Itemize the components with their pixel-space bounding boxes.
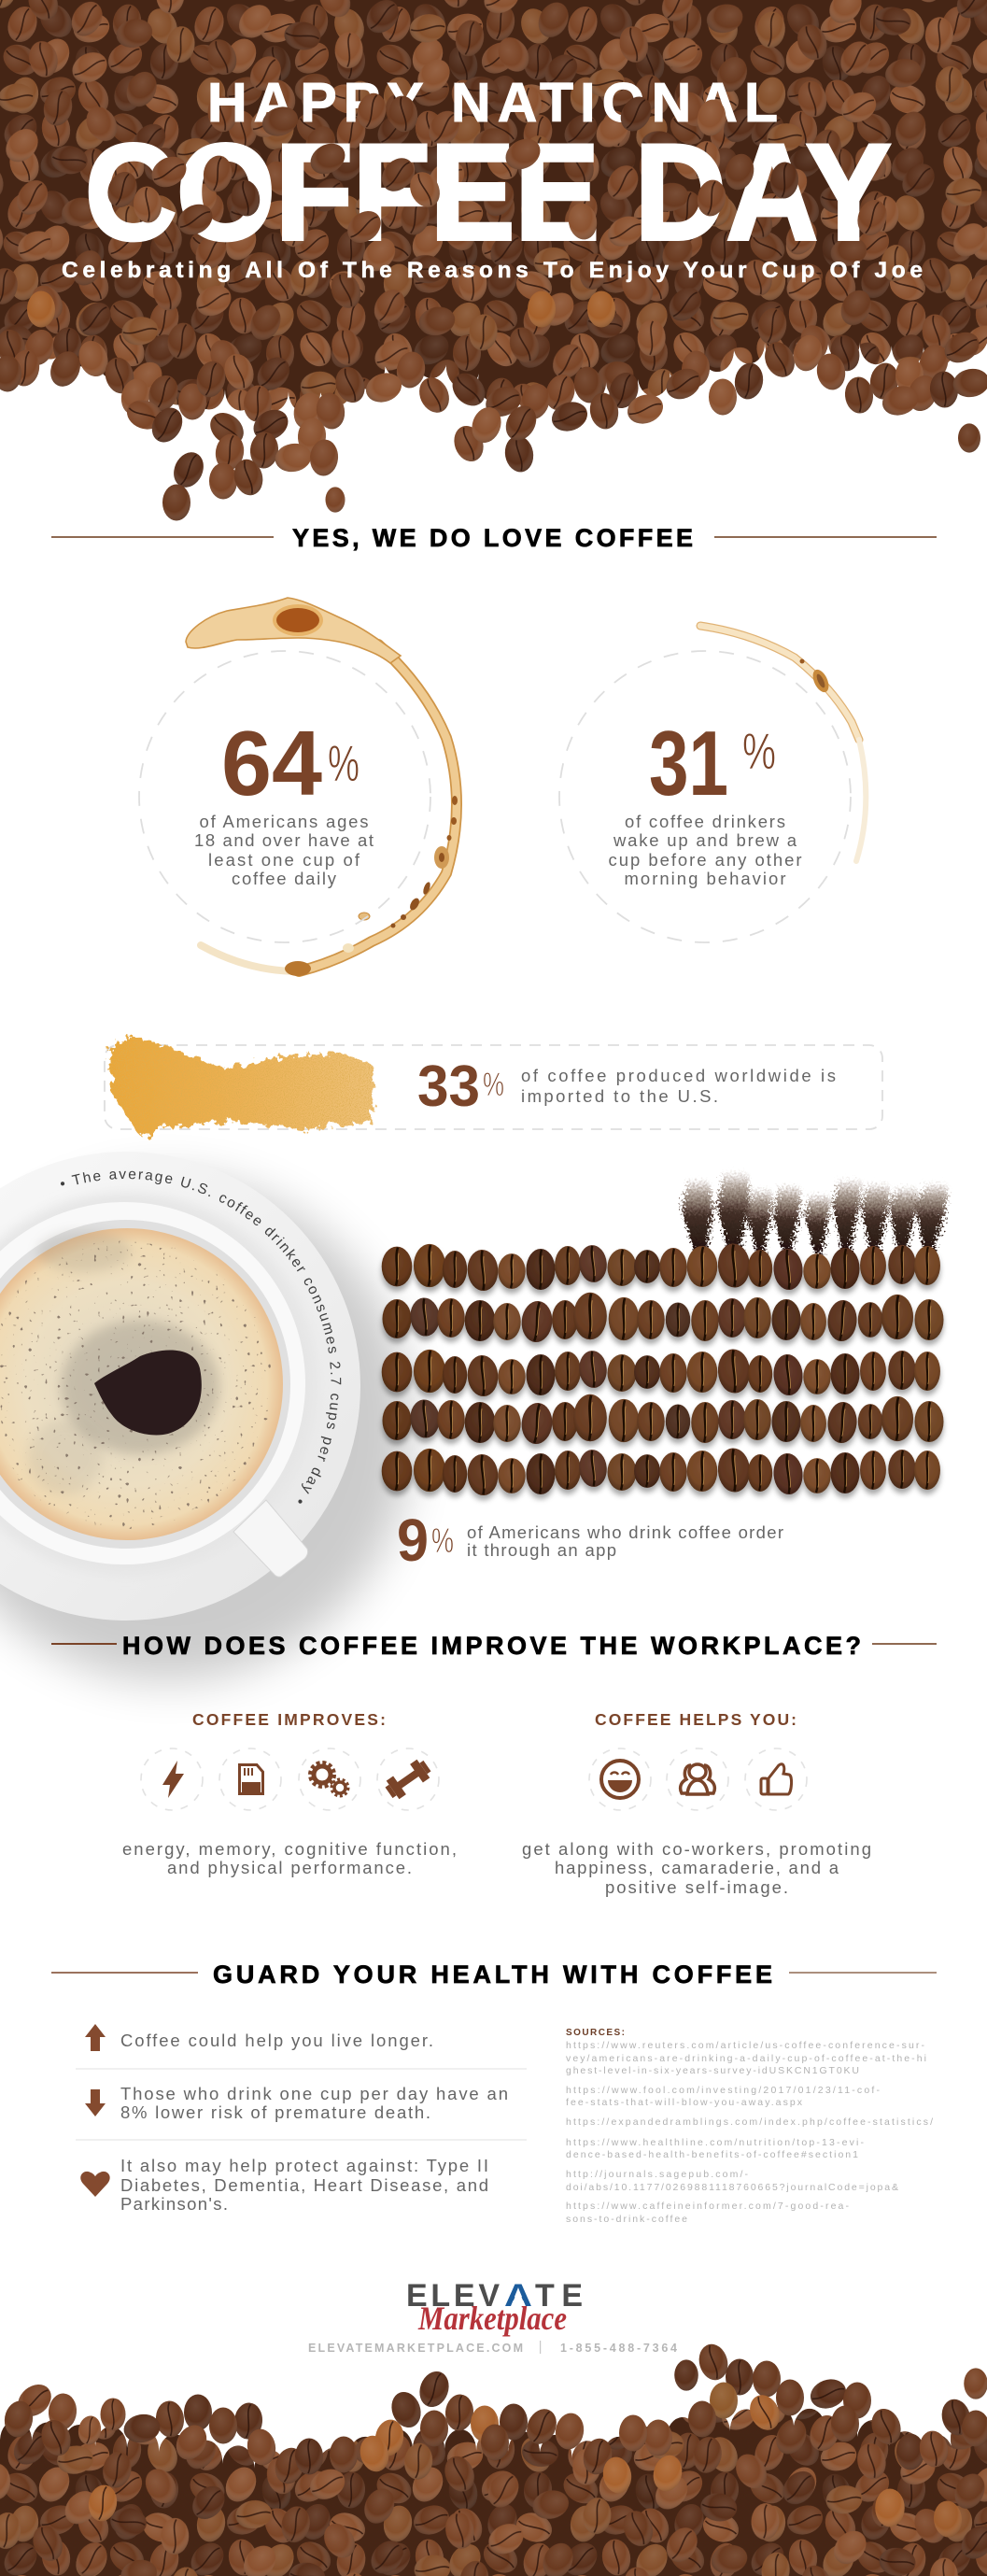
icon: heart [80,2172,110,2197]
stat: 31 percent: cup before any other [609,850,801,870]
panel: coffee improves: COFFEE IMPROVES: [192,1710,386,1729]
benefit: protection: Diabetes, Dementia, Heart Disease, and [120,2175,488,2195]
header bean field [0,0,987,521]
stat panel: 33 percent: % [483,1067,504,1103]
coffee grounds above beans [682,1171,949,1253]
coffee surface [0,1228,283,1540]
coffee cup illustration [0,1152,431,1701]
cup handle [233,1500,308,1577]
title line: Coffee Day: COFFEE DAY [85,116,891,268]
icon: dumbbell [377,1748,439,1810]
benefit: protection: Parkinson's. [120,2194,228,2214]
subtitle: Celebrating All Of The Reasons To Enjoy Your Cup Of Joe [62,258,923,283]
benefit: live longer: Coffee could help you live longer. [120,2031,433,2050]
stat panel: 33 percent: imported to the U.S. [521,1086,718,1106]
panel: sources: vey/americans-are-drinking-a-daily-cup-of-coffee-at-the-hi [566,2053,926,2064]
brown sugar swatch [108,1035,374,1138]
icon: gears [299,1748,360,1810]
title line: Happy National: HAPPY NATIONAL [207,72,778,134]
icon: thumbs up [745,1748,807,1810]
logo: Elevate Marketplace [406,2278,583,2337]
contact line [308,2341,677,2355]
benefit: lower risk: Those who drink one cup per day have an [120,2084,508,2103]
stat: 9 percent: of Americans who drink coffee order [467,1522,783,1542]
coffee ring stain 2 [700,626,866,861]
panel: sources: https://www.caffeineinformer.com/7-good-rea- [566,2201,850,2212]
stat: 64 percent: % [328,734,360,792]
panel: sources: SOURCES: [566,2028,625,2038]
icon: lightning bolt [141,1748,203,1810]
benefit: protection: It also may help protect against: Type II [120,2156,488,2175]
stat: 9 percent: % [431,1522,454,1560]
panel: coffee helps you [522,1710,871,1897]
panel: sources: http://journals.sagepub.com/- [566,2169,749,2180]
stat: 31 percent: 31 [649,712,728,814]
beans overlapping title [103,90,892,249]
icon: smile [589,1748,651,1810]
panel: coffee helps you: positive self-image. [605,1877,788,1897]
saucer [0,1152,360,1621]
cup rim [0,1202,305,1564]
stat: 31 percent: of coffee drinkers [625,812,785,831]
stat: 64 percent: least one cup of [208,850,360,870]
icon: memory card [219,1748,281,1810]
logo: Elevate Marketplace: A [504,2278,532,2314]
panel: sources: dence-based-health-benefits-of-coffee#section1 [566,2149,858,2160]
stat: 31 percent: morning behavior [624,869,786,888]
panel: health benefits [76,2024,527,2214]
stat panel: 33 percent: of coffee produced worldwide is [521,1066,836,1085]
benefit: lower risk [120,2084,508,2122]
panel: coffee improves [122,1710,457,1877]
benefit: lower risk: 8% lower risk of premature death. [120,2102,430,2122]
stat: 64 percent: coffee daily [232,869,337,888]
stat panel: 33 percent: 33 [417,1054,480,1119]
benefit: protection [120,2156,488,2214]
panel: sources: https://www.healthline.com/nutrition/top-13-evi- [566,2137,865,2148]
logo: Elevate Marketplace: Marketplace [417,2300,567,2337]
foam bubbles [0,1239,272,1529]
rows of coffee beans [382,1242,944,1496]
panel: coffee helps you: COFFEE HELPS YOU: [595,1710,797,1729]
icon: arrow down [85,2089,106,2116]
stat panel: 33 percent [105,1035,882,1138]
panel: sources: ghest-level-in-six-years-survey-idUSKCN1GT0KU [566,2065,859,2076]
icon: people [667,1748,728,1810]
panel: coffee improves: and physical performance. [167,1858,412,1877]
logo: Elevate Marketplace: TE [535,2278,583,2314]
stat: 64 percent: 18 and over have at [194,830,374,850]
panel: sources: sons-to-drink-coffee [566,2214,687,2225]
logo: Elevate Marketplace: ELEV [406,2278,500,2314]
stat: 9 percent [397,1507,783,1574]
stat: 9 percent: it through an app [467,1540,616,1560]
contact line: ELEVATEMARKETPLACE.COM [308,2342,523,2355]
stat: 31 percent: wake up and brew a [613,830,797,850]
section heading: Yes, we do love coffee: YES, WE DO LOVE COFFEE [292,524,693,552]
section heading: guard your health: GUARD YOUR HEALTH WITH COFFEE [213,1960,772,1989]
section heading: workplace: HOW DOES COFFEE IMPROVE THE WORKPLACE? [122,1632,861,1660]
stat: 64 percent: 64 [221,712,322,814]
stat: 31 percent [559,651,851,942]
panel: sources: doi/abs/10.1177/0269881118760665?journalCode=jopa& [566,2182,898,2193]
stat: 31 percent: % [742,722,776,780]
panel: coffee helps you: get along with co-workers, promoting [522,1839,871,1859]
panel: coffee helps you: happiness, camaraderie, and a [555,1858,839,1877]
panel: coffee improves: energy, memory, cognitive function, [122,1839,457,1859]
stat: 64 percent [139,651,430,942]
title [62,72,923,283]
panel: sources: https://expandedramblings.com/index.php/coffee-statistics/ [566,2116,933,2128]
contact line: 1-855-488-7364 [560,2342,677,2355]
curved text on saucer: • The average U.S. coffee drinker consumes 2.7 cups per day • [60,1171,342,1504]
panel: sources [566,2028,933,2225]
footer bean field [0,2341,987,2576]
panel: sources: https://www.reuters.com/article/us-coffee-conference-sur- [566,2040,924,2051]
stat: 9 percent: 9 [397,1507,429,1574]
stat: 64 percent: of Americans ages [200,812,368,831]
coffee ring stain 1 [186,598,458,976]
panel: sources: fee-stats-that-will-blow-you-away.aspx [566,2097,803,2108]
icon: arrow up [85,2024,106,2051]
panel: sources: https://www.fool.com/investing/2017/01/23/11-cof- [566,2085,880,2096]
